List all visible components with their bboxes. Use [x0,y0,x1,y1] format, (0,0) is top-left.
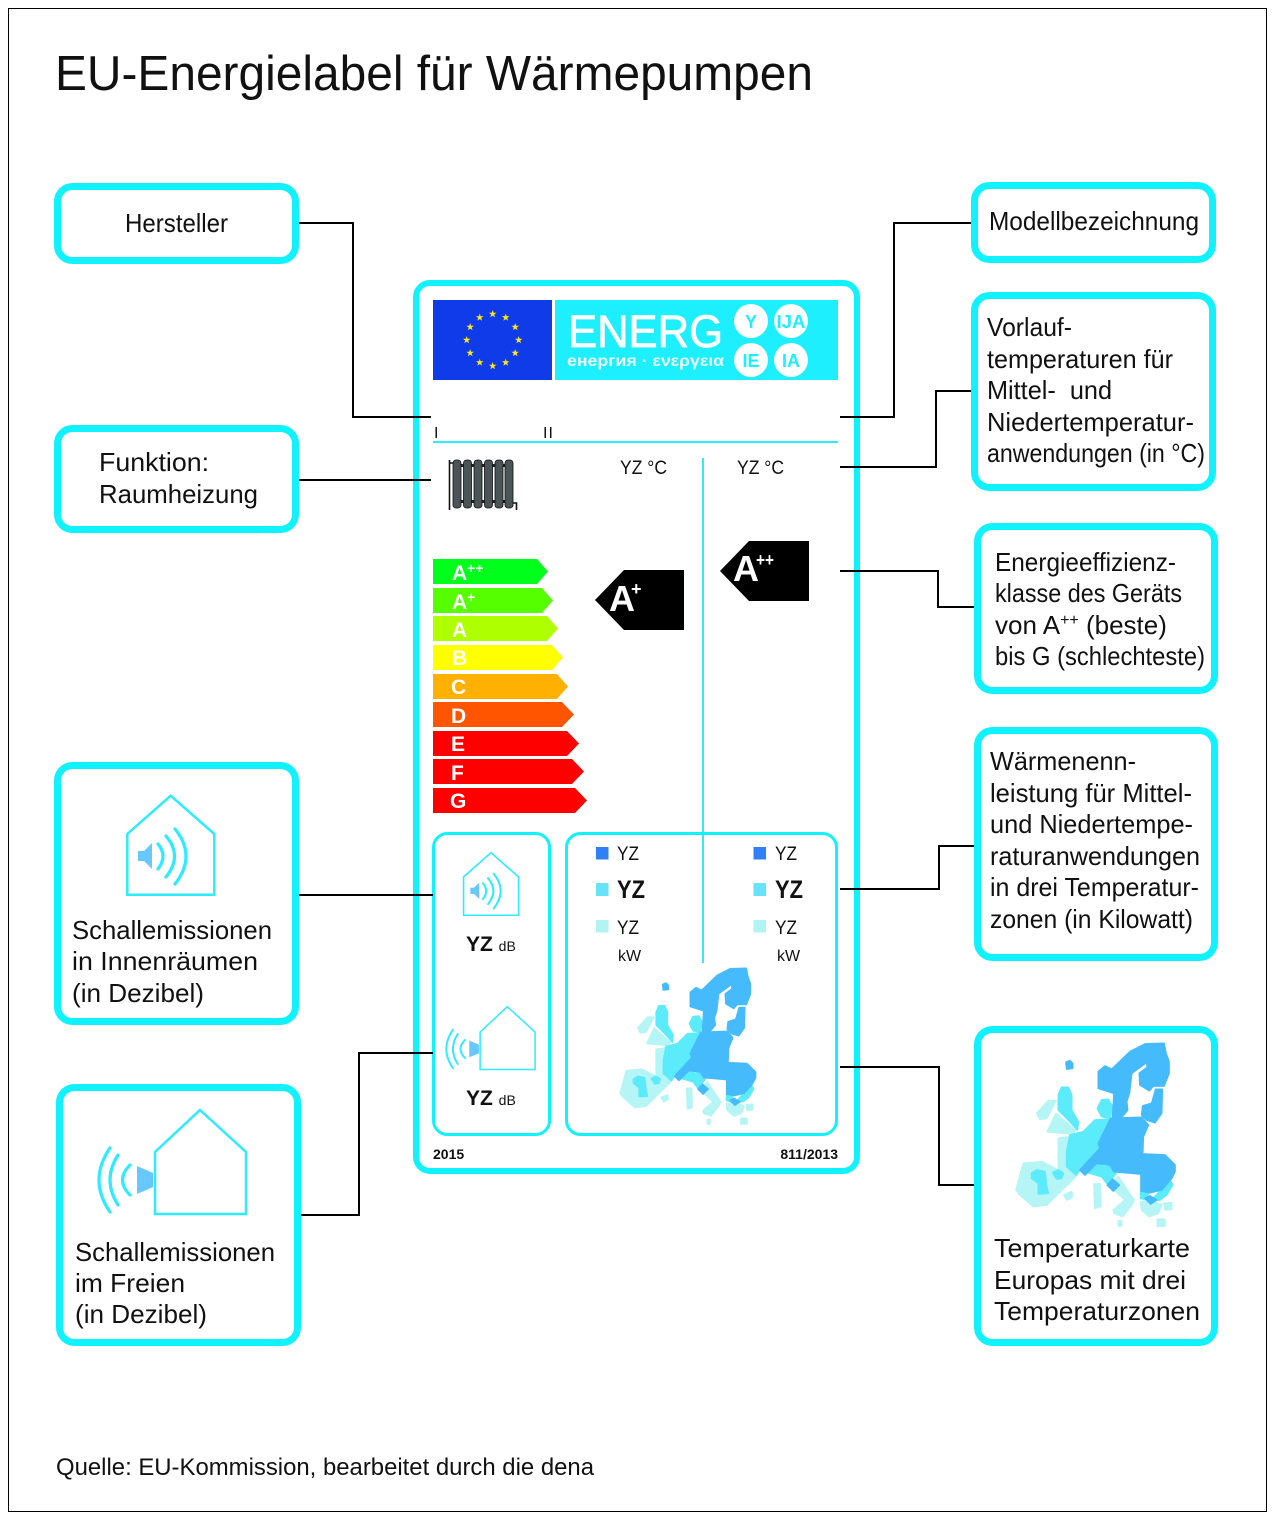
callout: Wärmenennleistung: leistung für Mittel- [990,778,1192,808]
connector: Wärmenennleistung [840,846,974,889]
callout: Energieeffizienzklasse: ++ [1060,612,1079,629]
Quelle: Quelle: EU-Kommission, bearbeitet durch die dena [56,1454,595,1481]
Effizienzskala: A [452,591,467,614]
icon: EU-Flagge [433,300,552,380]
callout: Schallemissionen im Freien: (in Dezibel) [75,1299,207,1329]
banner: ENERG: IJA [776,312,806,332]
callout: Wärmenennleistung: in drei Temperatur- [990,872,1199,902]
Pfeil: Klasse A+: + [631,579,642,599]
callout: Vorlauftemperaturen: Niedertemperatur- [987,407,1194,437]
banner: ENERG: енергия · ενεργεια [567,353,724,370]
callout: Temperaturkarte: Temperaturkarte [994,1233,1190,1263]
Hersteller- und Modell-Platzhalter: II [543,425,553,442]
icon: Europakarte groß [1016,1043,1175,1226]
Jahr: 2015 [433,1146,464,1162]
banner: ENERG [555,300,838,380]
callout: Energieeffizienzklasse: klasse des Geräts [995,578,1182,608]
connector: Modellbezeichnung [840,223,971,417]
Hersteller- und Modell-Platzhalter [434,425,553,442]
Pfeil: Klasse A++: A [733,548,759,589]
banner: ENERG: Y [745,312,757,332]
mittellinie [702,458,704,963]
Leistung links: YZ [617,876,645,904]
callout: Funktion Raumheizung: Funktion: [99,447,209,477]
Effizienzskala [433,559,587,813]
Wert: Schall innen: YZ dB [466,933,516,956]
connector: Schall innen [299,894,433,896]
Effizienzskala: A [452,562,467,585]
callout: Wärmenennleistung [978,730,1214,958]
panel: Wärmeleistung und Karte [566,834,836,1134]
callout: Modellbezeichnung [974,186,1212,260]
Pfeil: Klasse A+: A [609,578,635,619]
Leistung links: kW [618,948,642,965]
callout: Temperaturkarte [978,1030,1214,1342]
Leistung links: YZ [617,844,639,865]
callout: Wärmenennleistung: Wärmenenn- [990,746,1136,776]
callout: Wärmenennleistung: und Niedertempe- [990,809,1193,839]
connector: Hersteller [299,223,431,417]
callout: Energieeffizienzklasse: Energieeffizienz- [995,547,1176,577]
banner: ENERG: ENERG [568,306,723,357]
callout: Vorlauftemperaturen: Mittel- und [987,375,1112,405]
callout: Temperaturkarte: Temperaturzonen [994,1296,1200,1326]
callout: Vorlauftemperaturen: anwendungen (in °C) [987,438,1205,468]
callout: Energieeffizienzklasse: von A [995,610,1060,640]
callout: Schallemissionen im Freien: im Freien [75,1268,185,1298]
Leistung rechts: YZ [775,876,803,904]
callout: Wärmenennleistung: zonen (in Kilowatt) [990,904,1193,934]
Effizienzskala: F [451,762,464,785]
Leistung rechts [754,844,803,965]
callout: Modellbezeichnung: Modellbezeichnung [989,206,1199,236]
callout: Schallemissionen im Freien: Schallemissionen [75,1237,275,1267]
Effizienzskala: + [467,589,475,605]
icon: Europakarte klein [620,968,756,1124]
callout: Schallemissionen innen: Schallemissionen [72,915,272,945]
connector: Temperaturkarte [840,1067,974,1185]
Effizienzskala: ++ [467,560,484,576]
callout: Funktion Raumheizung [58,428,296,530]
Pfeil: Klasse A++ [720,541,809,601]
Effizienzskala: G [450,790,466,813]
Effizienzskala: B [452,647,467,670]
icon: Heizkörper [450,460,516,510]
callout: Temperaturkarte: Europas mit drei [994,1265,1186,1295]
Verordnung: 811/2013 [780,1146,838,1162]
icon: Schall außen klein [446,1007,535,1070]
callout: Hersteller: Hersteller [125,208,228,238]
panel: Energielabel [416,283,857,1171]
Leistung rechts: YZ [775,844,797,865]
Pfeil: Klasse A+ [595,570,684,630]
callout: Wärmenennleistung: raturanwendungen [990,841,1200,871]
connector: Vorlauftemperaturen [840,391,971,467]
trennlinie [433,441,838,443]
connector: Funktion [299,479,431,481]
icon: Haus mit Lautsprecher außen [99,1110,246,1214]
callout: Schallemissionen innen: in Innenräumen [72,946,258,976]
Effizienzskala: A [452,619,467,642]
connector: Energieeffizienzklasse [840,571,974,607]
callout: Schallemissionen innen [58,766,296,1022]
banner: ENERG: IA [782,351,800,371]
callout: Vorlauftemperaturen [974,296,1212,488]
Effizienzskala: C [451,676,466,699]
Wert: Schall außen: YZ dB [466,1087,516,1110]
title: EU-Energielabel für Wärmepumpen [55,47,813,101]
callout: Schallemissionen innen: (in Dezibel) [72,978,204,1008]
callout: Vorlauftemperaturen: Vorlauf- [987,312,1072,342]
callout: Energieeffizienzklasse: (beste) [1079,610,1167,640]
callout: Hersteller [58,186,296,260]
icon: Haus mit Lautsprecher innen [127,796,214,895]
Effizienzskala: D [451,705,466,728]
Pfeil: Klasse A++: ++ [756,550,774,570]
callout: Energieeffizienzklasse: bis G (schlechteste) [995,641,1205,671]
callout: Energieeffizienzklasse [978,526,1214,690]
callout: Vorlauftemperaturen: temperaturen für [987,344,1173,374]
Leistung links: YZ [617,918,639,939]
banner: ENERG: IE [742,351,760,371]
Effizienzskala: E [451,733,465,756]
callout: Schallemissionen im Freien [60,1088,298,1342]
Leistung links [596,844,645,965]
icon: Schall innen klein [464,853,519,915]
connector: Schall im Freien [301,1053,433,1215]
callout: Funktion Raumheizung: Raumheizung [99,479,258,509]
panel: Schallwerte [434,834,550,1134]
Leistung rechts: YZ [775,918,797,939]
Hersteller- und Modell-Platzhalter: I [434,425,438,442]
Temperatur links: YZ °C [620,458,667,479]
Temperatur rechts: YZ °C [737,458,784,479]
Leistung rechts: kW [777,948,801,965]
